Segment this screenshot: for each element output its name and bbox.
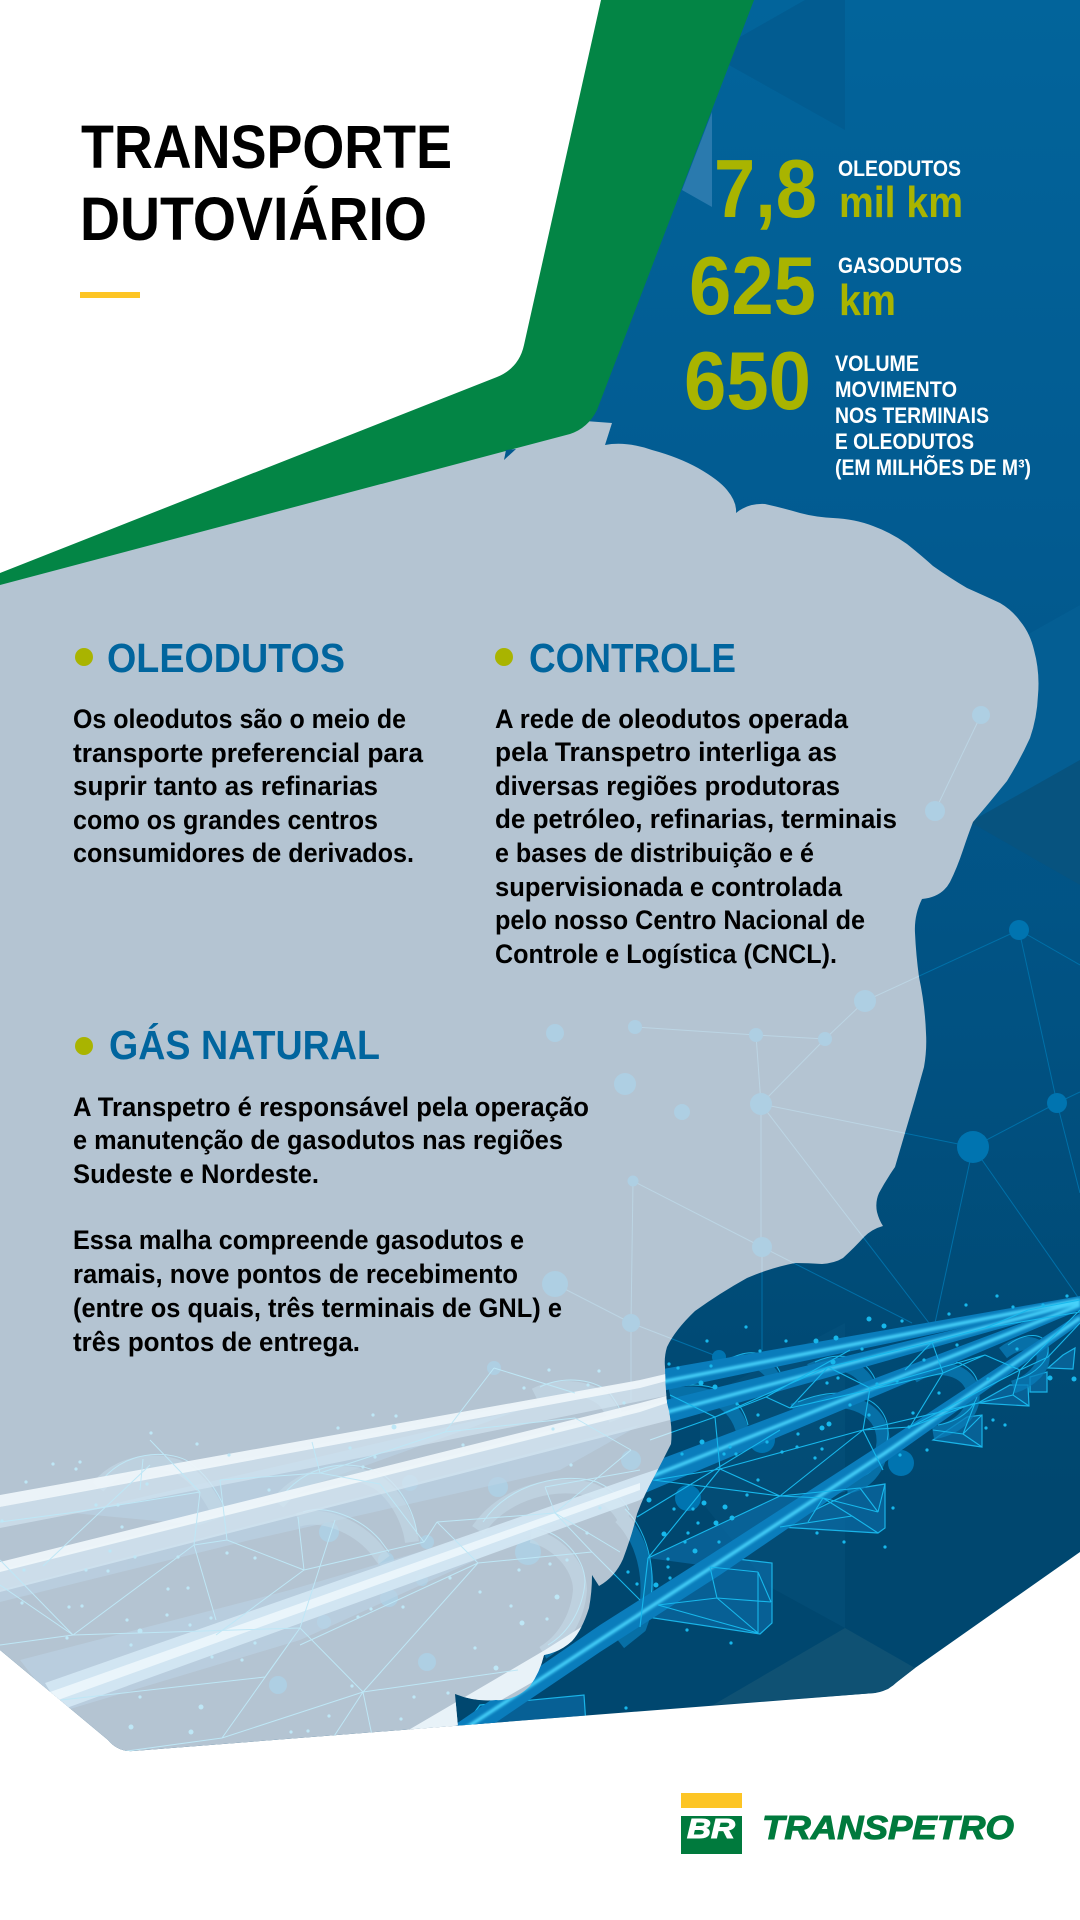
stat: gasodutos: [689, 239, 962, 332]
pale pipe loops: [98, 1381, 634, 1655]
body text: Controle e Logística (CNCL).: [495, 939, 837, 969]
body text: consumidores de derivados.: [73, 838, 414, 868]
heading: GÁS NATURAL: [109, 1022, 380, 1068]
small blue tip under band: [504, 449, 516, 460]
body text: três pontos de entrega.: [73, 1327, 360, 1357]
bullet: [75, 1037, 93, 1055]
stat: volume: E OLEODUTOS: [835, 429, 974, 454]
body text: (entre os quais, três terminais de GNL) e: [73, 1293, 562, 1323]
body text: pela Transpetro interliga as: [495, 737, 837, 767]
body text: ramais, nove pontos de recebimento: [73, 1259, 518, 1289]
body text: e bases de distribuição e é: [495, 838, 814, 868]
logo green square: [681, 1816, 742, 1854]
wireframe mesh, cyan: [125, 1294, 1080, 1751]
body text: [73, 704, 424, 868]
heading: CONTROLE: [529, 635, 736, 681]
blue faceted shapes: [682, 0, 1080, 1705]
body text: A Transpetro é responsável pela operação: [73, 1092, 589, 1122]
body text: supervisionada e controlada: [495, 872, 843, 902]
stat: volume: MOVIMENTO: [835, 377, 957, 402]
green diagonal band: [0, 0, 754, 585]
body text: [73, 1092, 589, 1357]
network and pipelines on blue background: [125, 920, 1080, 1751]
map of Brazil: [0, 421, 1038, 1760]
wireframe mesh, pale: [0, 1368, 672, 1751]
body text: suprir tanto as refinarias: [73, 771, 378, 801]
stat: oleodutos: mil km: [839, 178, 963, 227]
body text: Os oleodutos são o meio de: [73, 704, 406, 734]
pipe loop outlines, pale: [106, 1380, 636, 1646]
logo: BR Transpetro: [681, 1793, 1014, 1854]
section: gás natural: [73, 1022, 589, 1357]
pipe loop outlines, cyan: [635, 1335, 1049, 1593]
title: DUTOVIÁRIO: [80, 185, 427, 253]
pipe loops, blue: [544, 1337, 1050, 1658]
pale pipe bands: [0, 1373, 670, 1735]
body text: A rede de oleodutos operada: [495, 704, 849, 734]
logo BR letters: BR: [687, 1813, 736, 1844]
section: oleodutos: [73, 635, 424, 868]
body text: e manutenção de gasodutos nas regiões: [73, 1125, 563, 1155]
stat: volume: [684, 334, 1031, 480]
network nodes, light: [269, 706, 990, 1694]
yellow accent bar: [80, 292, 140, 298]
body text: diversas regiões produtoras: [495, 771, 840, 801]
stat: volume: NOS TERMINAIS: [835, 403, 989, 428]
body text: transporte preferencial para: [73, 738, 424, 768]
body text: [495, 704, 897, 969]
title: [80, 113, 452, 253]
bullet: [75, 648, 93, 666]
body text: como os grandes centros: [73, 805, 378, 835]
stat: oleodutos: 7,8: [714, 142, 817, 235]
pipe highlights: [440, 1300, 1080, 1745]
pipe bands, blue: [440, 1296, 1080, 1740]
logo yellow bar: [681, 1793, 742, 1808]
pipeline supports: [458, 1348, 1075, 1735]
stat: oleodutos: [714, 142, 963, 235]
stat: volume: 650: [684, 334, 811, 427]
bullet: [495, 648, 513, 666]
stat: volume: VOLUME: [835, 351, 919, 376]
logo wordmark: TRANSPETRO: [762, 1810, 1014, 1847]
body text: pelo nosso Centro Nacional de: [495, 905, 865, 935]
stat: volume: (EM MILHÕES DE M³): [835, 455, 1031, 480]
heading: OLEODUTOS: [107, 635, 345, 681]
section: controle: [495, 635, 897, 969]
body text: Sudeste e Nordeste.: [73, 1159, 319, 1189]
stat: oleodutos: OLEODUTOS: [838, 156, 961, 181]
title: TRANSPORTE: [81, 113, 452, 181]
body text: Essa malha compreende gasodutos e: [73, 1225, 524, 1255]
stat: gasodutos: GASODUTOS: [838, 253, 962, 278]
network and pipelines over the map: [0, 706, 1080, 1752]
stat: gasodutos: km: [839, 276, 896, 325]
pale pipe shadows: [0, 1410, 640, 1712]
network nodes, dark: [672, 920, 1080, 1511]
body text: de petróleo, refinarias, terminais: [495, 804, 897, 834]
stat: gasodutos: 625: [689, 239, 816, 332]
